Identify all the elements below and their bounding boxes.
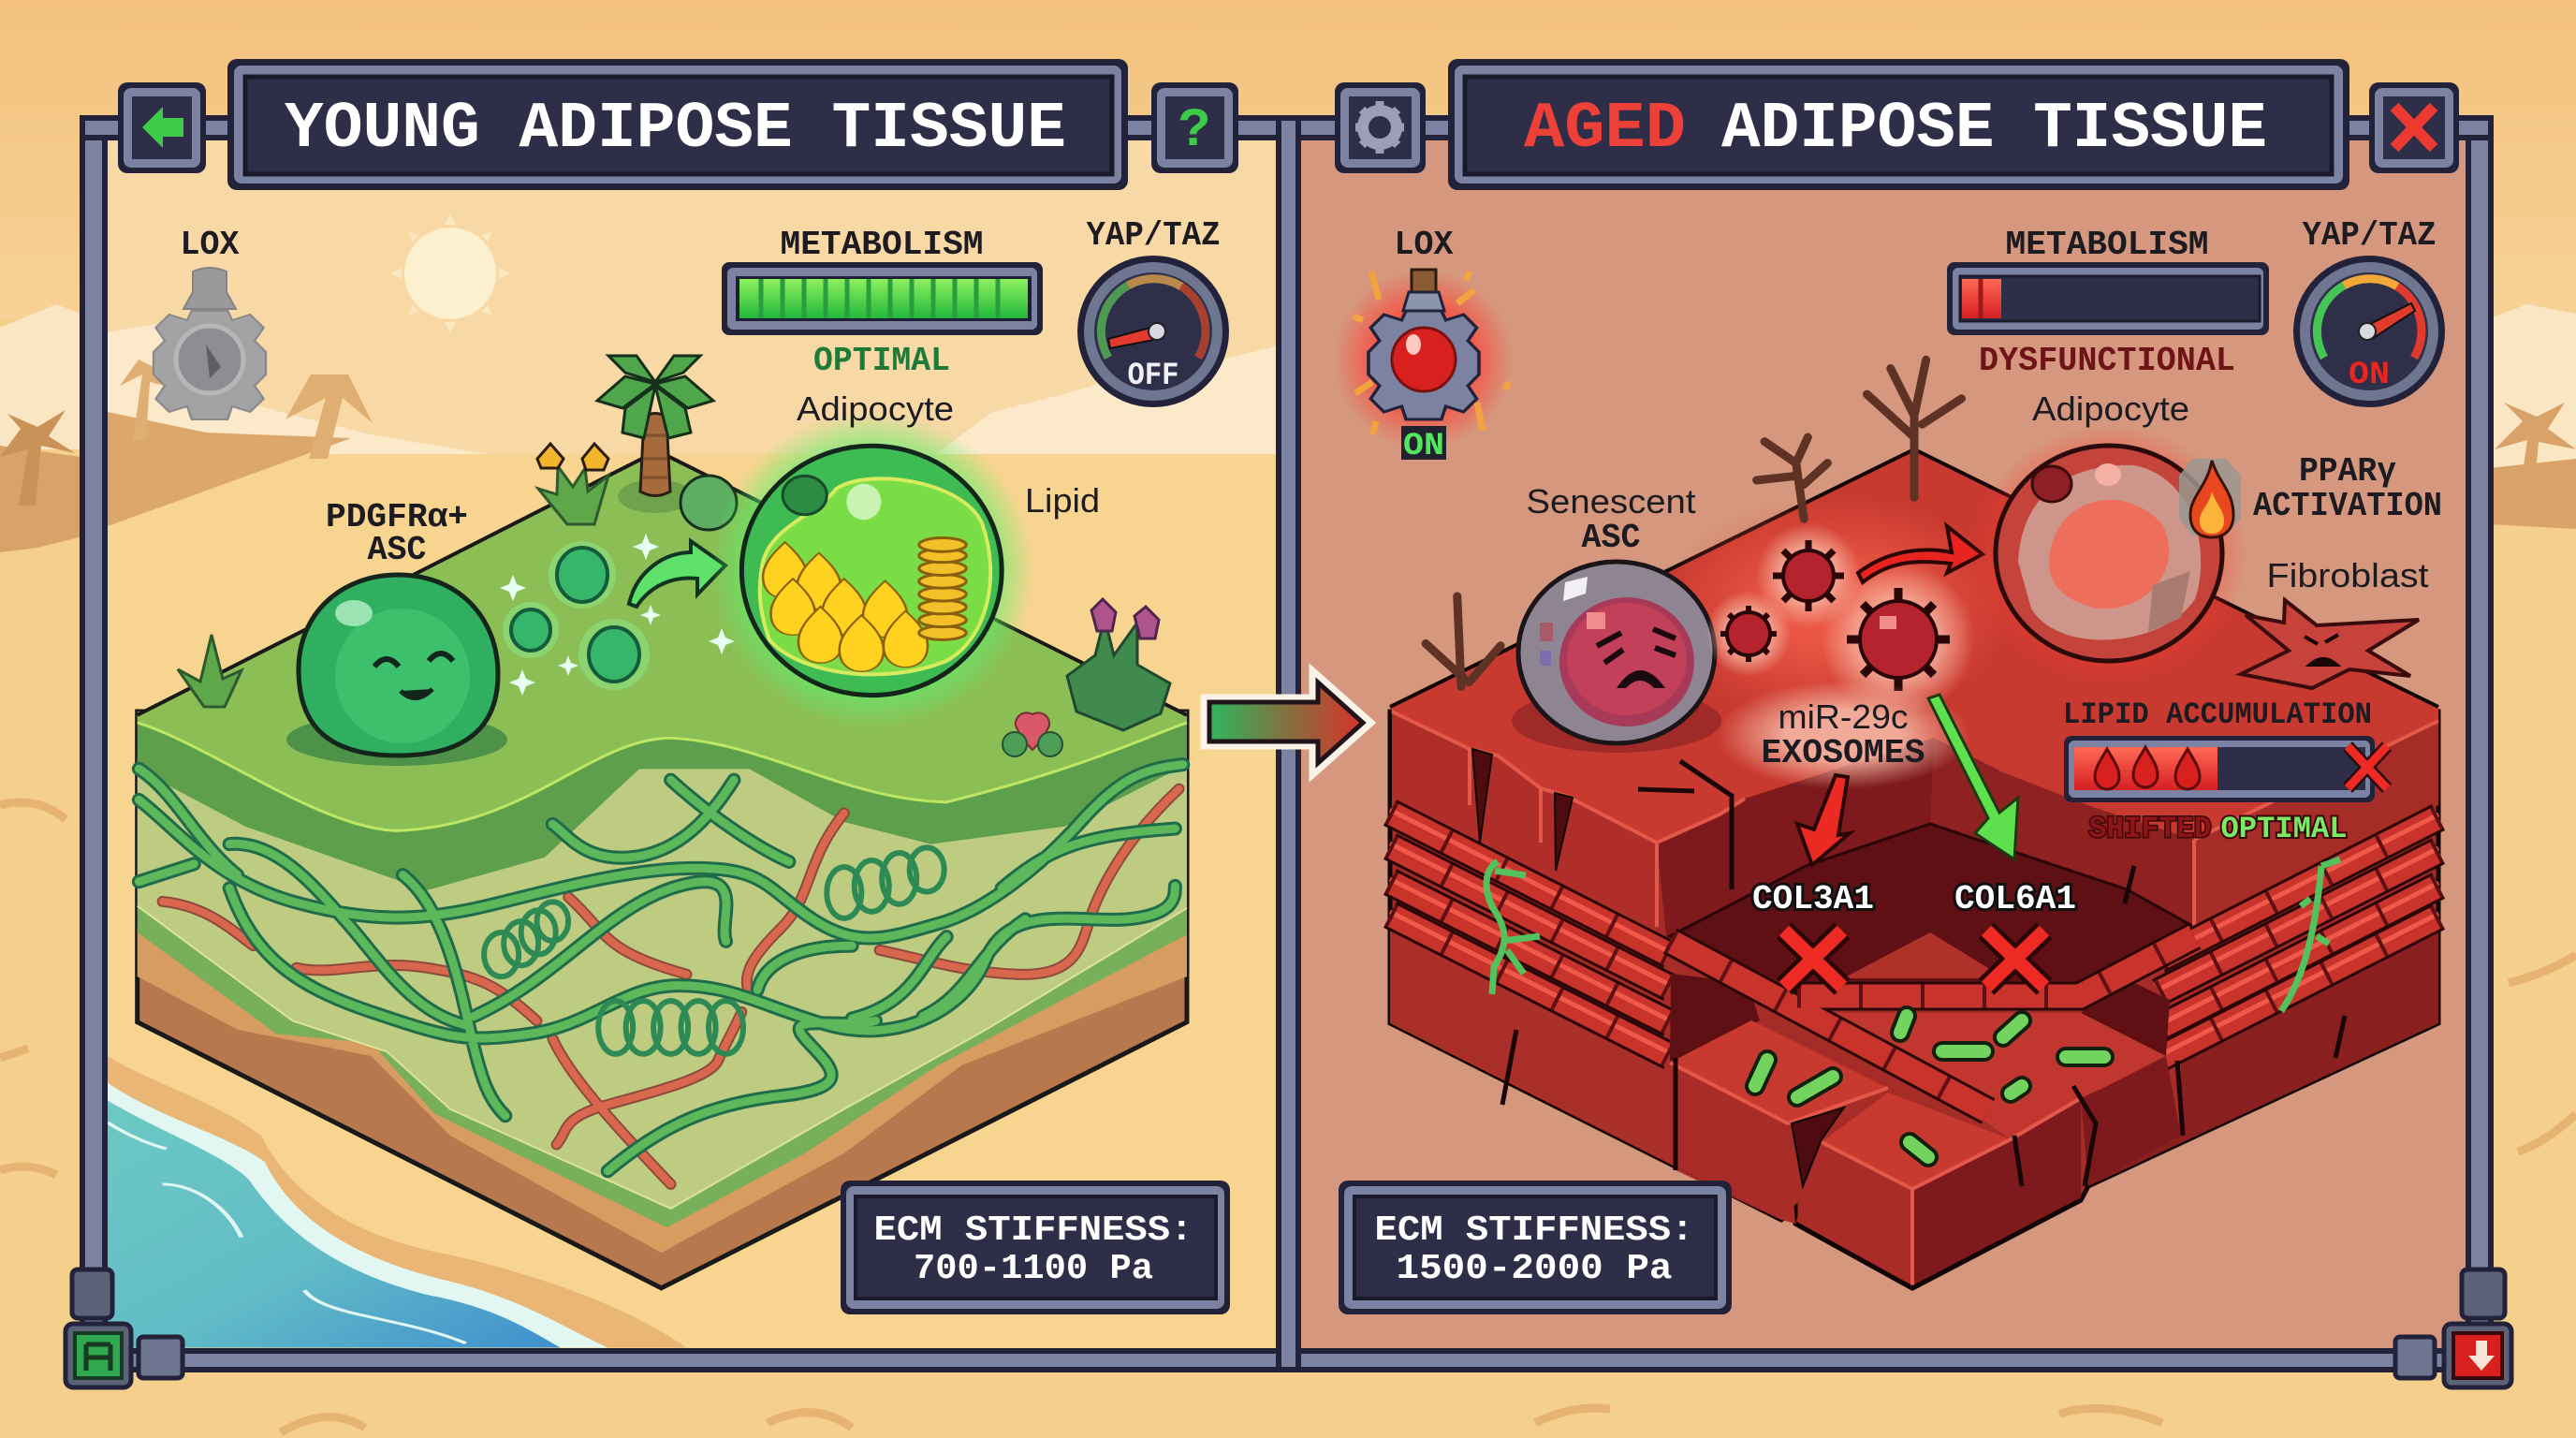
label: miR-29c exosomes	[1762, 697, 1925, 772]
title text aged: AGED	[1524, 93, 1686, 167]
front cube	[1795, 1093, 2081, 1288]
lipid droplets	[763, 542, 928, 671]
frame corner controls right	[2395, 1269, 2511, 1387]
arrow: down to COL3A1	[1797, 775, 1850, 865]
label: Fibroblast: Fibroblast	[2267, 556, 2428, 594]
label: PPARg: PPARγ	[2299, 452, 2396, 491]
cell: aged adipocyte	[1970, 424, 2247, 682]
button: settings gear	[1335, 82, 1426, 173]
icon: dead tree short	[1757, 437, 1827, 519]
arrow: senescent signal to adipocyte	[1858, 526, 1983, 582]
label: activation: ACTIVATION	[2253, 487, 2442, 525]
isometric aged tissue block	[1390, 449, 2438, 1288]
title bar: aged adipose tissue	[1448, 59, 2349, 190]
dead trees	[1426, 360, 1962, 686]
stiff collagen bundles right	[2159, 814, 2438, 1059]
icon: palm tree	[597, 356, 713, 513]
icon: dead shrub	[1426, 596, 1500, 686]
button: help: ?	[1178, 101, 1210, 162]
status: LOX on: ON	[1403, 429, 1444, 464]
icon: LOX inactive gear flask	[154, 268, 266, 419]
x mark overlay	[2348, 746, 2387, 788]
text: stiffness label aged: ECM STIFFNESS:	[1374, 1211, 1694, 1251]
callout: ECM stiffness aged	[1339, 1181, 1732, 1314]
label: PDGFRa+ ASC: PDGFRα+	[326, 498, 468, 536]
label: lipid accumulation: LIPID ACCUMULATION	[2063, 697, 2372, 732]
icon: bush	[681, 476, 737, 530]
lipid accumulation meter	[2064, 736, 2387, 802]
arrow: exosomes to adipocyte	[629, 541, 725, 607]
green vines	[1486, 859, 2340, 1011]
icon: heart plant	[1003, 712, 1062, 756]
title text: YOUNG ADIPOSE TISSUE	[285, 93, 1066, 167]
cell: PDGFRa+ ASC slime	[286, 575, 507, 766]
icon: limit x	[2348, 746, 2387, 788]
dark gaps at pit corners	[1670, 974, 2170, 1065]
text: stiffness label: ECM STIFFNESS:	[874, 1211, 1193, 1251]
exosomes: spiky red vesicles	[1705, 523, 1975, 716]
isometric young tissue block	[138, 451, 1187, 1288]
icon: x under COL6A1	[1986, 931, 2044, 987]
metabolism meter: optimal	[722, 226, 1043, 380]
label: metabolism aged: METABOLISM	[2005, 226, 2209, 264]
label: miR-29c exosomes: EXOSOMES	[1762, 734, 1925, 772]
sun	[390, 213, 510, 333]
label: ASC: ASC	[367, 531, 427, 569]
block silhouette	[1390, 712, 2438, 1288]
lipid coin stack	[919, 538, 966, 639]
icon: LOX active flask	[1334, 270, 1514, 449]
icon: dead tree tall	[1867, 360, 1962, 497]
cracks	[1472, 749, 1844, 1186]
icon: PPARg flame badge	[2179, 459, 2241, 537]
label: YAP/TAZ: YAP/TAZ	[1086, 216, 1221, 255]
button: back arrow	[118, 82, 206, 173]
icon: x under COL3A1	[1784, 931, 1842, 987]
label: LOX aged: LOX	[1395, 226, 1454, 264]
YAP/TAZ gauge: off	[1077, 216, 1229, 407]
top surface	[1390, 449, 2438, 843]
label: optimal: OPTIMAL	[813, 342, 950, 380]
collagen coils	[484, 847, 944, 1054]
icon: pink flowers	[1067, 599, 1170, 730]
icon: yellow flowers	[537, 444, 608, 524]
central collagen bundles	[1670, 936, 2194, 1111]
arrow: young to aged transition	[1204, 670, 1371, 775]
label: shifted optimal: OPTIMAL	[2220, 812, 2348, 846]
label: Senescent: Senescent	[1526, 482, 1696, 521]
left lower block	[1670, 1020, 1888, 1224]
title bar: young adipose tissue	[227, 59, 1128, 190]
metabolism meter: dysfunctional	[1947, 226, 2269, 380]
soft glow: exosome field	[1657, 496, 2012, 721]
label: YAP/TAZ aged: YAP/TAZ	[2303, 216, 2436, 255]
label: COL6A1: COL6A1	[1954, 880, 2076, 918]
label: Lipid: Lipid	[1025, 481, 1100, 520]
label: Adipocyte young: Adipocyte	[797, 389, 954, 428]
collagen fibers: green	[139, 765, 1183, 1171]
label: miR-29c exosomes: miR-29c	[1778, 697, 1908, 736]
cell: senescent ASC	[1512, 562, 1721, 753]
upper block faces	[1392, 712, 1657, 936]
cell: healthy adipocyte	[710, 412, 1033, 729]
button: help	[1151, 82, 1238, 173]
lower wall faces	[1390, 927, 1781, 1220]
text: stiffness value: 700-1100 Pa	[914, 1249, 1153, 1289]
label: off: OFF	[1127, 359, 1179, 394]
label: shifted optimal	[2089, 812, 2348, 846]
label: on: ON	[2349, 358, 2390, 393]
icon: sprout	[178, 635, 242, 707]
broken green fibers	[1755, 1016, 2104, 1157]
label: COL3A1: COL3A1	[1752, 880, 1874, 918]
stiff collagen bundles left	[1390, 810, 1670, 1056]
arrow: green to COL6A1	[1928, 695, 2018, 859]
YAP/TAZ gauge: on	[2293, 216, 2445, 407]
panel background: beach scene	[108, 140, 1276, 1353]
central lower plate	[1822, 1013, 2166, 1139]
icon: fibroblast star cell	[2241, 600, 2419, 688]
label: Adipocyte aged: Adipocyte	[2032, 389, 2189, 428]
collagen fibers: red	[163, 789, 1179, 1184]
ocean shoreline	[108, 1056, 686, 1348]
panel: aged adipose tissue	[1301, 140, 2469, 1348]
label: LOX: LOX	[180, 226, 240, 264]
glow behind exosome label	[1717, 681, 1969, 789]
button: close	[2369, 82, 2459, 173]
right lower block	[2081, 1056, 2181, 1186]
text: stiffness value aged: 1500-2000 Pa	[1397, 1249, 1672, 1289]
label: shifted optimal: SHIFTED	[2089, 812, 2211, 846]
title text adipose tissue: ADIPOSE TISSUE	[1721, 93, 2267, 167]
label: ASC aged: ASC	[1582, 519, 1640, 557]
label: metabolism: METABOLISM	[781, 226, 983, 264]
callout: ECM stiffness young	[841, 1181, 1230, 1314]
exosomes: green vesicles	[500, 534, 735, 696]
exposed pit	[1670, 824, 2194, 992]
frame corner controls left	[66, 1269, 183, 1387]
label: dysfunctional: DYSFUNCTIONAL	[1979, 342, 2235, 380]
panel: young adipose tissue	[108, 140, 1276, 1353]
